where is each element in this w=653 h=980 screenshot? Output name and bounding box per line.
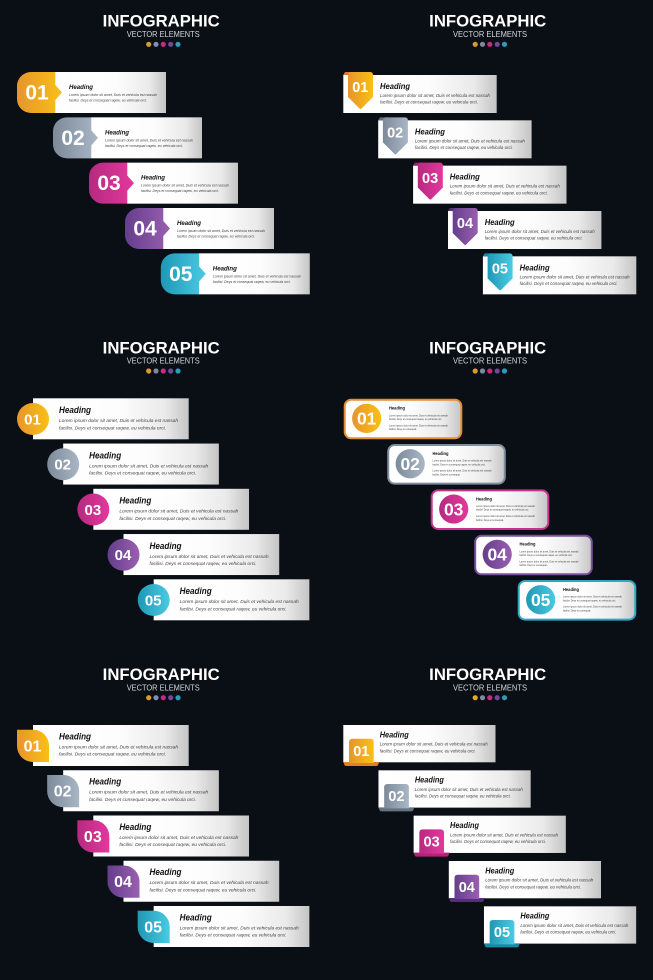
step 04: Lorem ipsum dolor sit amet, Duis et vehicula est nassah (520, 559, 579, 563)
step 04: 04 (115, 547, 132, 564)
step 05: Heading (180, 912, 212, 922)
step 03: facilisi. Deys et consequat raqew, eu vehicula orci. (450, 190, 548, 195)
step 01: Lorem ipsum dolor sit amet, Duis et vehicula est nassah (69, 93, 157, 97)
step 03: 03 (84, 829, 102, 846)
step 03: Lorem ipsum dolor sit amet, Duis et vehicula est nassah (450, 184, 560, 189)
title: INFOGRAPHIC (429, 666, 546, 684)
step 02: facilisi. Deys et consequat raqew, eu vehicula orci. (415, 145, 513, 150)
step 05: facilisi. Deys et consequat. (563, 608, 591, 612)
step 05: facilisi. Deys et consequat raqew, eu vehicula orci. (520, 281, 618, 286)
step 01: 01 (352, 80, 368, 96)
step 02: Lorem ipsum dolor sit amet, Duis et vehicula est nassah (89, 463, 208, 469)
step 03: 03 (424, 834, 440, 850)
step 02 (53, 117, 202, 158)
panel: bottom right ribbon square steps (343, 666, 636, 947)
step 01: Lorem ipsum dolor sit amet, Duis et vehicula est nassah (59, 418, 178, 424)
step 03: facilisi. Deys et consequat. (476, 518, 504, 522)
step 04: facilisi. Deys et consequat raqew, eu vehicula orci. (485, 884, 581, 889)
title (429, 13, 546, 47)
step 04: 04 (457, 216, 473, 232)
step 05: Lorem ipsum dolor sit amet, Duis et vehicula est nassah (520, 274, 630, 279)
step 04: Heading (150, 867, 182, 877)
step 03: Heading (141, 175, 165, 182)
step 03 (89, 163, 238, 204)
step 01: facilisi. Deys et consequat raqew, eu vehicula orci. (69, 98, 147, 102)
step 05: 05 (531, 590, 551, 610)
step 01: Heading (389, 406, 405, 411)
step 05: 05 (144, 919, 162, 936)
step 04: Lorem ipsum dolor sit amet, Duis et vehicula est nassah (520, 549, 579, 553)
step 02: Heading (89, 450, 122, 460)
step 04 (125, 208, 274, 249)
step 02 (47, 770, 219, 811)
step 05 (484, 906, 636, 947)
step 02: 02 (400, 454, 420, 474)
step 02 (388, 445, 505, 484)
step 01 (17, 72, 166, 113)
title: INFOGRAPHIC (103, 666, 220, 684)
step 03: 03 (422, 171, 438, 187)
step 05: 05 (145, 592, 162, 609)
step 02: facilisi. Deys et consequat. (432, 472, 461, 476)
step 05: facilisi. Deys et consequat raqew, eu vehicula orci. (563, 598, 616, 602)
step 05: Heading (213, 265, 237, 272)
step 05: Lorem ipsum dolor sit amet, Duis et vehicula est nassah (563, 595, 622, 599)
step 01: facilisi. Deys et consequat raqew, eu vehicula orci. (59, 752, 166, 758)
step 04: 04 (459, 880, 475, 896)
step 04: Lorem ipsum dolor sit amet, Duis et vehicula est nassah (485, 229, 595, 234)
step 05: facilisi. Deys et consequat raqew, eu vehicula orci. (180, 933, 287, 939)
step 02: Heading (415, 775, 444, 785)
step 03: Heading (476, 496, 492, 501)
title: VECTOR ELEMENTS (127, 682, 200, 692)
step 05: 05 (169, 263, 193, 286)
step 01: 01 (25, 82, 49, 104)
title: VECTOR ELEMENTS (127, 29, 200, 39)
step 05 (161, 253, 310, 294)
step 05: Lorem ipsum dolor sit amet, Duis et vehicula est nassah (520, 923, 629, 928)
step 01: Heading (59, 731, 92, 741)
title (103, 339, 220, 374)
step 03: Lorem ipsum dolor sit amet, Duis et vehicula est nassah (119, 835, 239, 841)
step 03: 03 (84, 502, 101, 519)
step 05: facilisi. Deys et consequat raqew, eu vehicula orci. (180, 606, 287, 612)
step 02: Lorem ipsum dolor sit amet, Duis et vehicula est nassah (89, 790, 208, 796)
title (103, 13, 220, 47)
step 05: Lorem ipsum dolor sit amet, Duis et vehicula est nassah (180, 925, 299, 931)
step 03: Heading (119, 496, 152, 506)
step 01: facilisi. Deys et consequat raqew, eu vehicula orci. (380, 748, 476, 753)
step 05: Lorem ipsum dolor sit amet, Duis et vehicula est nassah (180, 599, 299, 605)
step 01: 01 (357, 409, 377, 429)
step 02: facilisi. Deys et consequat raqew, eu vehicula orci. (415, 794, 511, 799)
step 04: Heading (485, 217, 515, 227)
step 01: facilisi. Deys et consequat raqew, eu vehicula orci. (59, 425, 166, 431)
title (103, 666, 220, 700)
step 02 (47, 444, 219, 485)
step 04: 04 (114, 874, 132, 891)
step 03: Lorem ipsum dolor sit amet, Duis et vehicula est nassah (141, 184, 229, 188)
step 04 (448, 208, 601, 249)
step 04 (449, 861, 601, 902)
title (429, 339, 546, 374)
step 03: 03 (97, 172, 121, 195)
step 01: 01 (353, 744, 369, 760)
step 02: Lorem ipsum dolor sit amet, Duis et vehicula est nassah (105, 138, 193, 142)
step 05: Heading (180, 586, 212, 596)
step 04: Heading (485, 865, 514, 875)
step 05: Heading (563, 587, 579, 592)
step 05: 05 (494, 925, 510, 941)
step 02: Heading (89, 777, 122, 787)
step 02: Heading (432, 451, 449, 456)
step 03: Heading (450, 820, 479, 830)
step 03: Lorem ipsum dolor sit amet, Duis et vehicula est nassah (119, 508, 239, 514)
step 05: Heading (520, 262, 550, 272)
step 01: facilisi. Deys et consequat raqew, eu vehicula orci. (380, 100, 478, 105)
step 05 (138, 579, 309, 620)
step 05: facilisi. Deys et consequat raqew, eu vehicula orci. (213, 280, 291, 284)
step 01: Heading (380, 729, 409, 739)
step 01: Heading (380, 81, 410, 91)
step 04: 04 (133, 218, 157, 240)
step 01: Heading (59, 405, 92, 415)
step 01 (17, 398, 189, 439)
step 03: facilisi. Deys et consequat raqew, eu vehicula orci. (476, 508, 529, 512)
step 02: facilisi. Deys et consequat raqew, eu vehicula orci. (89, 471, 196, 477)
step 03 (414, 816, 566, 857)
step 01: Lorem ipsum dolor sit amet, Duis et vehicula est nassah (380, 742, 488, 747)
step 05 (519, 581, 635, 620)
step 01 (343, 725, 496, 766)
step 04: Heading (177, 220, 201, 227)
step 05: facilisi. Deys et consequat raqew, eu vehicula orci. (520, 930, 616, 935)
step 04: Heading (150, 541, 182, 551)
step 05: Lorem ipsum dolor sit amet, Duis et vehicula est nassah (213, 274, 301, 278)
step 03 (413, 163, 566, 204)
step 02: Heading (415, 126, 445, 136)
step 04: Lorem ipsum dolor sit amet, Duis et vehicula est nassah (150, 880, 269, 886)
step 03 (77, 489, 249, 530)
panel: middle right outlined rounded cards (345, 339, 635, 620)
step 01 (343, 72, 497, 113)
step 02: Lorem ipsum dolor sit amet, Duis et vehicula est nassah (432, 459, 492, 463)
step 04: Lorem ipsum dolor sit amet, Duis et vehicula est nassah (485, 878, 594, 883)
step 01: Lorem ipsum dolor sit amet, Duis et vehicula est nassah (380, 93, 490, 98)
step 04: facilisi. Deys et consequat raqew, eu vehicula orci. (150, 887, 256, 893)
step 04: facilisi. Deys et consequat raqew, eu vehicula orci. (177, 234, 255, 238)
step 02 (378, 117, 532, 158)
step 01: 01 (24, 738, 42, 755)
step 02: facilisi. Deys et consequat raqew, eu vehicula orci. (432, 462, 486, 466)
step 03: 03 (444, 499, 464, 519)
title: INFOGRAPHIC (429, 339, 546, 357)
title: VECTOR ELEMENTS (127, 356, 200, 366)
title: VECTOR ELEMENTS (453, 356, 527, 366)
title (429, 666, 546, 700)
step 01: Lorem ipsum dolor sit amet, Duis et vehicula est nassah (389, 423, 448, 427)
step 02: 02 (61, 127, 85, 150)
step 05 (483, 253, 636, 294)
panel: top left arrow badge steps (17, 13, 310, 294)
step 04: 04 (487, 545, 507, 565)
step 04 (108, 534, 279, 575)
step 04: facilisi. Deys et consequat. (520, 563, 548, 567)
title: INFOGRAPHIC (429, 13, 546, 31)
step 02: 02 (387, 126, 403, 142)
step 01: 01 (24, 411, 41, 428)
step 03 (77, 816, 249, 856)
step 02: 02 (54, 784, 72, 801)
step 03: Heading (119, 822, 152, 832)
step 05 (138, 906, 309, 947)
title: VECTOR ELEMENTS (453, 29, 527, 39)
title: VECTOR ELEMENTS (453, 682, 527, 692)
panel: top right pennant tag steps (343, 13, 636, 294)
step 01: facilisi. Deys et consequat raqew, eu vehicula orci. (389, 417, 442, 421)
step 03: facilisi. Deys et consequat raqew, eu vehicula orci. (141, 189, 219, 193)
step 02: 02 (54, 457, 71, 474)
step 02: Heading (105, 129, 129, 136)
step 02: facilisi. Deys et consequat raqew, eu vehicula orci. (105, 144, 183, 148)
step 02: Lorem ipsum dolor sit amet, Duis et vehicula est nassah (415, 138, 525, 143)
step 04 (475, 536, 592, 574)
step 01: Lorem ipsum dolor sit amet, Duis et vehicula est nassah (59, 744, 178, 750)
step 02: facilisi. Deys et consequat raqew, eu vehicula orci. (89, 797, 196, 803)
panel: middle left circle badge steps (17, 339, 309, 620)
step 01: Lorem ipsum dolor sit amet, Duis et vehicula est nassah (389, 413, 448, 417)
step 04: Heading (520, 542, 536, 547)
step 01 (17, 725, 189, 766)
step 03: Lorem ipsum dolor sit amet, Duis et vehicula est nassah (476, 504, 535, 508)
title: INFOGRAPHIC (103, 339, 220, 357)
step 04: facilisi. Deys et consequat raqew, eu vehicula orci. (485, 236, 583, 241)
step 04: Lorem ipsum dolor sit amet, Duis et vehicula est nassah (177, 229, 265, 233)
step 03: Heading (450, 172, 480, 182)
step 01: Heading (69, 84, 93, 91)
step 05: Heading (520, 911, 549, 921)
step 03: facilisi. Deys et consequat raqew, eu vehicula orci. (119, 842, 226, 848)
panel: bottom left leaf badge steps (17, 666, 309, 947)
step 03: Lorem ipsum dolor sit amet, Duis et vehicula est nassah (450, 832, 558, 837)
step 03: facilisi. Deys et consequat raqew, eu vehicula orci. (450, 839, 546, 844)
step 02: Lorem ipsum dolor sit amet, Duis et vehicula est nassah (432, 469, 492, 473)
step 04: Lorem ipsum dolor sit amet, Duis et vehicula est nassah (150, 554, 269, 560)
title: INFOGRAPHIC (103, 13, 220, 31)
step 05: 05 (492, 262, 508, 278)
step 01 (345, 400, 461, 438)
step 02: Lorem ipsum dolor sit amet, Duis et vehicula est nassah (415, 787, 523, 792)
step 03: facilisi. Deys et consequat raqew, eu vehicula orci. (119, 516, 226, 522)
step 04: facilisi. Deys et consequat raqew, eu vehicula orci. (150, 561, 256, 567)
step 05: Lorem ipsum dolor sit amet, Duis et vehicula est nassah (563, 605, 622, 609)
step 02 (378, 770, 531, 811)
step 02: 02 (388, 789, 405, 805)
step 03 (432, 490, 548, 529)
step 01: facilisi. Deys et consequat. (389, 427, 417, 431)
step 03: Lorem ipsum dolor sit amet, Duis et vehicula est nassah (476, 514, 535, 518)
step 04 (108, 861, 279, 902)
step 04: facilisi. Deys et consequat raqew, eu vehicula orci. (520, 553, 573, 557)
